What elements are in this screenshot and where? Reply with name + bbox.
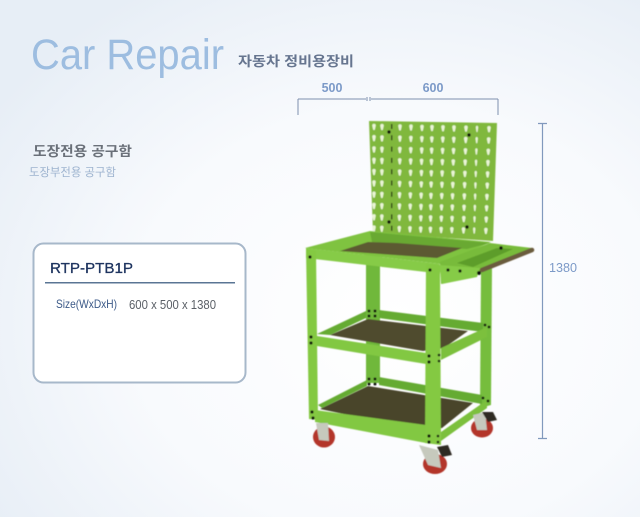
back rear post: [366, 238, 380, 383]
label 1380: 1380: [549, 261, 577, 275]
model name: RTP-PTB1P: [50, 260, 133, 277]
tool cart: [305, 121, 532, 474]
subtitle: 자동차 정비용장비: [238, 54, 354, 69]
front centre post: [425, 264, 441, 445]
product heading: 도장전용 공구함: [33, 144, 133, 159]
side tray with handle: [439, 243, 532, 284]
size label: Size(WxDxH): [56, 297, 117, 311]
right rear post: [480, 266, 492, 408]
top shelf: [305, 231, 491, 272]
label 600: 600: [423, 81, 443, 95]
product subheading: 도장부전용 공구함: [29, 166, 116, 179]
size value: 600 x 500 x 1380: [129, 297, 216, 312]
middle shelf: [317, 310, 487, 364]
pegboard panel: [369, 121, 497, 241]
caster: right rear: [471, 412, 497, 438]
title: Car Repair: [31, 31, 224, 79]
front left post: [306, 249, 318, 420]
caster: front left: [313, 423, 335, 448]
heading rule: [45, 282, 235, 284]
caster: front centre: [419, 445, 452, 474]
bottom shelf: [315, 377, 487, 443]
bolt holes: [308, 255, 490, 444]
height dimension: 1380: [538, 123, 577, 438]
label 500: 500: [322, 81, 342, 95]
panel: specification card: [34, 244, 246, 382]
width dimension: 500 and 600: [298, 81, 498, 115]
